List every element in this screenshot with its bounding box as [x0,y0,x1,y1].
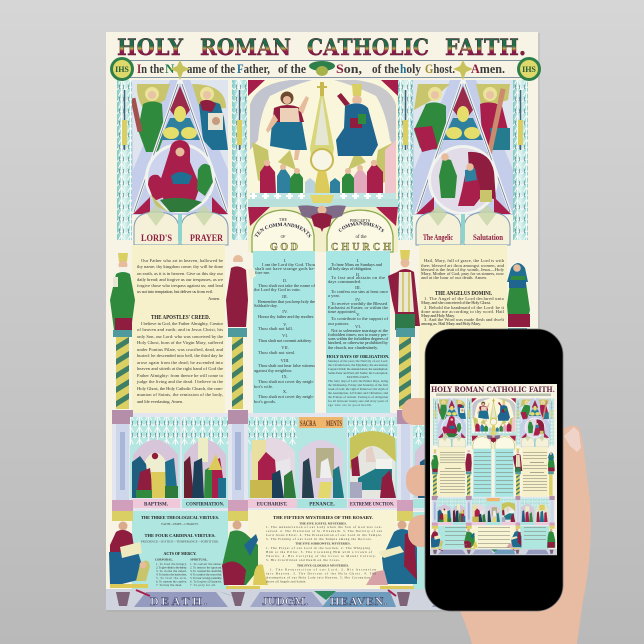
icon: evangelist with bull [366,520,417,589]
sacrament labels: BAPTISM. [144,502,169,508]
text block: precepts of the church: age who are in good health. [328,403,372,407]
heading: sacraments [300,419,342,428]
text block: virtues and mercy: 2. To give drink to the thirsty. [156,566,187,570]
text block: lord's prayer: forgive those who trespass against us; and lead [137,283,224,288]
text block: precepts of the church: To fast and abstain on the [331,275,385,280]
text block: virtues and mercy: 6. To forgive all injuries. [190,580,222,584]
text block: precepts of the church: our pastors. [328,321,349,326]
text block: commandments of god: V. [283,322,287,327]
text block: angelus: 2. Behold the handmaid of the Lord: be it [424,305,505,310]
heading: angelus domini: THE ANGELUS DOMINI. [435,290,492,297]
panel: rosary mysteries [248,510,396,588]
icon: pope figure [388,250,420,330]
arch labels: Salutation [473,232,503,242]
text block: lord's prayer: thy name; thy kingdom come; thy will be done [137,264,223,269]
text block: commandments of god: bor's wife. [254,384,273,389]
text block: precepts of the church: II. [356,272,360,277]
kneeling saints right [330,140,396,193]
sacrament labels: PENANCE. [309,502,335,508]
panel: virtues [132,511,228,589]
heading: sacraments: MENTS [326,419,342,428]
text block: precepts of the church: III. [355,285,361,290]
text block: angelus: 1. The Angel of the Lord declared unto [424,296,505,301]
text block: virtues and mercy: THE FOUR CARDINAL VIRTUES. [144,533,216,538]
text block: lord's prayer: Amen. [208,296,220,301]
text block: virtues and mercy: 4. To harbor the harborless. [156,572,187,576]
text block: precepts of the church: V. [356,312,360,317]
hand holding phone [402,398,591,644]
text block: precepts of the church: the Assumption, All Saints and Christmas; and [328,391,388,396]
phone [425,329,563,611]
text block: precepts of the church: kindred, or otherwise prohibited by [328,340,389,346]
miniature poster on screen [430,384,557,555]
text block: angelus: 3. And the Word was made flesh and dwelt [424,317,505,322]
banner text: DEATH. [150,594,207,608]
text block: commandments of god: II. [283,278,287,283]
arch labels: The Angelic [423,232,453,242]
text block: precepts of the church: a year. [328,293,340,298]
text block: precepts of the church: days commanded. [328,279,361,284]
panel: sacrament band [112,410,530,511]
icon: angel green and red [414,87,446,152]
text block: fifteen mysteries of the rosary: above all Angels and Saints. [266,580,306,584]
text block: commandments of god [254,258,316,404]
banner text: JUDGM. [262,594,308,608]
text block: virtues and mercy: 1. To feed the hungry. [156,562,187,566]
panel: right gothic arch with angels [413,78,513,215]
text block: angelus: Mary and Holy Mary. [421,313,455,318]
icon: christ enthroned [266,92,309,160]
text block: commandments of god: I. [284,258,286,263]
text block: precepts of the church [327,258,389,407]
text block: precepts of the church: Corpus Christi; the Annunciation; the Assumption; [328,367,388,371]
text block: apostles' creed: heaven and sitteth at the right hand of God the [137,366,223,371]
text block: precepts of the church: the Circumcision; the Epiphany; the Ascension; [328,363,388,367]
text block: fifteen mysteries of the rosary: 5. The Finding of our Lord in the Temple among the Doctors. [266,537,372,541]
heading: sacraments: SACRA [300,419,316,428]
text block: precepts of the church: the Fridays of Advent. Fasting is of obligation [328,395,388,399]
text block: precepts of the church: To receive worthily the Blessed [331,301,388,306]
scene: eucharist [248,417,297,498]
invocation line: holy [400,61,421,76]
text block: commandments of god: fore me. [255,270,270,275]
panel: commandment arches [248,195,398,252]
heading: ten commandments of god: GOD [270,242,298,253]
text block: precepts of the church: forbidden times; not to marry per- [328,332,388,337]
heading: ten commandments of god: TEN COMMANDMENTS [254,222,312,238]
text block: apostles' creed: arose again from the dead; he ascended into [137,360,224,365]
text block: virtues and mercy: 4. To comfort the sorrowful. [190,572,222,576]
text block: precepts of the church: week of Lent; the vigil of Pentecost; the vigils of [328,387,389,391]
text block: commandments of god: Thou shalt not take the name of [258,283,315,288]
invocation line: Amen. [471,61,505,76]
text block: precepts of the church: The forty days of Lent; the Ember Days, being [328,379,388,384]
text block: virtues and mercy: ACTS OF MERCY. [164,551,197,556]
scene: extreme unction [348,417,397,498]
text block: commandments of god: Honor thy father and thy mother. [258,314,314,319]
scene: holy orders [463,417,512,498]
text block: hail mary: Hail, Mary, full of grace, the Lord is with [424,258,505,264]
invocation line: of the [278,61,306,76]
heading: commandments of the church [331,218,392,253]
text block: virtues and mercy: 6. To ransom the captive. [156,580,187,584]
text block: fifteen mysteries of the rosary: 5. His Crucifixion and Death on the Cross. [266,558,340,562]
text block: fifteen mysteries of the rosary: THE FIVE GLORIOUS MYSTERIES. [297,564,349,568]
icon: evangelist far right [504,522,532,585]
text block: fifteen mysteries of the rosary: into Heaven. 3. The Descent of the Holy Ghost. 4. The [266,572,377,576]
panel: parchment text fields [132,245,507,413]
text block: commandments of god: I am the Lord thy God. Thou [262,262,316,267]
text block: fifteen mysteries of the rosary: Thorns. 4. His Carrying of the Cross to Mount Calvary. [266,554,376,558]
text block: apostles' creed: Holy Ghost, the Holy Catholic Church, the com- [137,386,223,392]
arch labels [141,232,503,244]
text block: virtues and mercy: CORPORAL. [155,558,173,562]
text block: lord's prayer: us not into temptation, but deliver us from evil. [137,289,213,295]
text block: virtues and mercy: 3. To counsel the doubtful. [190,569,222,573]
text block: virtues and mercy: THE THREE THEOLOGICAL VIRTUES. [141,515,219,520]
text block: fifteen mysteries of the rosary: Assumption of our Holy Lady into Heaven. 5. Her Coronation [266,576,370,580]
heading: ten commandments of god: OF [281,235,285,239]
scene: baptism [130,417,180,498]
panel: centre glory scene [248,80,398,207]
text block: virtues and mercy: 1. To convert the sinner. [190,562,222,566]
text block: fifteen mysteries of the rosary: ceived. 2. The Visitation of St. Elizabeth. 3. The Nativity of our [266,529,382,533]
text block: precepts of the church: Not to solemnize marriage at the [331,328,388,333]
roundel: annunciation [428,145,498,215]
banner text [150,594,387,608]
text block: precepts of the church: IV. [355,297,361,302]
scene: confirmation [182,417,228,498]
title: HOLY [117,35,183,61]
text block: apostles' creed [136,321,224,404]
invocation line: of the [372,61,399,76]
text block: apostles' creed: Father Almighty: from thence he will come to [137,373,224,378]
left pillars [117,80,247,240]
text block: commandments of god: IX. [282,374,288,379]
text block: apostles' creed: Holy Ghost, born of the Virgin Mary, suffered [137,340,224,346]
text block: fifteen mysteries of the rosary: 1. The Prayer of our Lord in the Garden. 2. The Whipping [266,546,370,550]
text block: commandments of god: Thou shalt not covet thy neigh- [258,394,314,399]
text block: commandments of god: the Lord thy God in vain. [254,287,301,292]
sacrament labels: EXTREME UNCTION. [350,502,395,508]
invocation line: ame of the [187,61,235,76]
icon: pope enthroned [336,84,378,156]
icon: angel in green [131,87,164,152]
icon: right roundel with monogram: IHS [522,65,536,74]
icon: monstrance [310,82,334,194]
text block: commandments of god: Thou shalt not covet thy neigh- [258,379,314,384]
text block: apostles' creed: under Pontius Pilate, was crucified, dead, and [137,347,224,353]
text block: precepts of the church: the church, nor clandestinely. [328,345,378,351]
text block: apostles' creed: of heaven and earth; and in Jesus Christ, his [137,327,223,333]
icon: saint patrick figure [110,253,135,330]
poster artwork [106,32,538,610]
text block: commandments of god: Thou shalt not steal. [258,350,295,355]
text block: fifteen mysteries of the rosary: THE FIFTEEN MYSTERIES OF THE ROSARY. [273,515,373,520]
text block: precepts of the church: sons within the forbidden degrees of [328,336,388,341]
title [117,35,526,61]
icon: spiral columns [113,328,527,409]
icon: evangelist in green with lion [222,520,268,589]
text block: angelus: among us. Hail Mary and Holy Mary. [421,321,481,326]
invocation line: In the [137,61,164,76]
text block: fifteen mysteries of the rosary: THE FIVE JOYFUL MYSTERIES. [299,522,347,526]
icon: left roundel with IHS: IHS [115,65,129,74]
invocation line: Son, [336,61,362,76]
heading: apostles' creed: THE APOSTLES' CREED. [151,314,210,321]
heading: commandments of the church: COMMANDMENTS [338,222,384,232]
text block: precepts of the church: To contribute to the support of [331,316,388,321]
text block: commandments of god: Thou shalt not commit adultery. [258,338,312,343]
text block: apostles' creed: judge the living and the dead. I believe in the [136,379,223,384]
text block: lord's prayer: Our Father who art in heaven, hallowed be [141,258,223,264]
scene: marriage [413,417,462,498]
heading: ten commandments of god [254,217,312,253]
sacrament labels [144,502,395,508]
text block: angelus [421,296,505,326]
right pillars [398,80,528,240]
text block: virtues and mercy: 7. To pray for all. [190,583,216,587]
icon: right roundel with monogram [517,57,541,81]
title: FAITH. [445,35,526,61]
text block: commandments of god: Remember that you keep holy the [258,299,315,304]
text block: angelus: Mary, and she conceived of the Holy Ghost. [421,300,491,306]
text block: virtues and mercy: SPIRITUAL. [190,558,208,562]
icon: bust with wings in shield [298,195,346,229]
text block: virtues and mercy [141,515,222,587]
arch labels: LORD'S [141,234,172,244]
text block: fifteen mysteries of the rosary: Lord Jesus Christ. 4. The Presentation of our Lord in the Temple. [266,533,382,537]
text block: lord's prayer: daily bread; and forgive us our trespasses, as we [137,277,223,283]
text block: commandments of god: shalt not have strange gods be- [255,266,315,271]
text block: commandments of god: III. [282,294,288,299]
poster shadow [107,33,540,612]
text block: precepts of the church: HOLY DAYS OF OBLIGATION. [327,354,389,359]
icon: moses figure [226,255,256,327]
text block: virtues and mercy: PRUDENCE—JUSTICE—TEMPERANCE—FORTITUDE. [141,540,219,544]
text block: precepts of the church: To hear Mass on Sundays and [331,262,383,267]
roundel [145,140,215,213]
text block: precepts of the church: Sundays of the year; the Nativity of our Lord; [328,359,388,363]
heading: commandments of the church: of the [355,235,367,240]
text block: precepts of the church: for all between twenty-one and sixty years of [328,399,389,403]
text block: commandments of god: Sabbath-day. [254,303,278,308]
invocation line [130,60,522,78]
text block: commandments of god: IV. [282,309,288,314]
text block: virtues and mercy: 2. To instruct the ignorant. [190,566,222,570]
text block: precepts of the church: Eucharist at Easter, or within the [328,305,388,311]
text block: commandments of god: VII. [281,345,289,350]
arch labels: PRAYER [190,234,223,244]
text block: fifteen mysteries of the rosary: THE FIVE SORROWFUL MYSTERIES. [295,542,351,546]
banner: last things [106,589,538,610]
text block: hail mary [421,258,505,280]
panel: lord's prayer label arches [134,205,228,248]
text block: virtues and mercy: 7. To bury the dead. [156,583,182,587]
text block: commandments of god: X. [283,389,287,394]
icon: angel in blue [199,87,228,150]
label plates [133,499,512,508]
text block: precepts of the church: time appointed. [328,309,357,314]
sacrament labels: CONFIRMATION. [186,502,225,508]
text block: commandments of god: VI. [282,333,288,338]
panel: commandment tablets [253,251,390,414]
text block: hail mary: thee; blessed art thou amongst women, and [421,263,505,269]
icon: angel red and blue [480,87,510,154]
text block: virtues and mercy: FAITH—HOPE—CHARITY. [161,522,199,526]
title: CATHOLIC [307,35,429,61]
banner text: HEAVEN. [330,594,387,608]
title: ROMAN [200,35,291,61]
text block: apostles' creed: and life everlasting. Amen. [137,399,183,404]
text block: precepts of the church: VI. [355,324,361,329]
text block: hail mary: and at the hour of our death. Amen. [421,275,487,280]
text block: lord's prayer [137,258,224,301]
scene: penance [297,417,347,498]
panel: right teal field [413,512,511,590]
text block: fifteen mysteries of the rosary [266,515,382,584]
text block: commandments of god: against thy neighbor. [254,368,292,373]
panel: left gothic arch with angels [131,78,228,215]
miniature poster on screen: HOLY ROMAN CATHOLIC FAITH. [431,385,555,394]
panel: angelic salutation label arches [416,205,510,248]
trefoil [160,86,200,140]
text block: virtues and mercy: 3. To clothe the naked. [156,569,187,573]
invocation line: N [165,61,175,76]
A-frame tracery [133,78,228,214]
text block: virtues and mercy: 5. To bear wrongs patiently. [190,576,222,580]
kneeling saints left [260,160,315,193]
heading: commandments of the church: CHURCH [331,242,391,253]
invocation line: Father, [237,61,270,76]
text block: fifteen mysteries of the rosary: 1. The Annunciation of our Lady when the Son of God was con- [266,525,382,529]
icon: centre wreath [309,61,335,76]
text block: commandments of god: Thou shalt not bear false witness [258,363,315,368]
text block: precepts of the church: To confess our sins at least once [331,289,388,294]
heading: ten commandments of god: THE [279,217,288,222]
text block: virtues and mercy: 5. To visit the sick. [156,576,187,580]
text block: precepts of the church: FASTING DAYS. [347,375,369,379]
text block: lord's prayer: on earth, as it is in heaven. Give us this day our [137,271,223,277]
sacrament labels: EUCHARIST. [257,502,288,508]
icon: star right [453,60,473,80]
text block: commandments of god: VIII. [280,358,290,363]
text block: angelus: done unto me according to thy word. Hail [421,309,505,314]
icon: madonna figure [507,263,530,327]
icon: evangelist red and blue [109,522,150,588]
gold shoulders [112,511,530,521]
icon: star left [170,60,190,80]
text block: precepts of the church: the Wednesday, Friday and Saturday of the first [328,383,388,388]
invocation line: Ghost. [425,61,455,76]
text block: fifteen mysteries of the rosary: 1. The Resurrection of our Lord. 2. His Ascension [270,568,376,572]
text block: apostles' creed: buried: he descended into hell, the third day he [137,353,223,359]
text block: hail mary: blessed is the fruit of thy womb, Jesus—Holy [421,267,505,273]
text block: precepts of the church: all holy days of obligation. [328,266,372,271]
icon: left roundel with IHS [110,57,134,81]
heading: commandments of the church: PRECEPTS [350,218,371,223]
text block: precepts of the church: I. [357,258,359,263]
text block: apostles' creed: I believe in God, the Father Almighty, Creator [141,321,223,327]
text block: commandments of god: Thou shalt not kill. [258,326,293,331]
text block: precepts of the church: Saints Peter and Paul; All Saints; the Conception. [328,371,388,375]
text block: commandments of god: bor's goods. [254,399,276,404]
text block: apostles' creed: only Son, our Lord: who was conceived by the [137,334,223,340]
text block: fifteen mysteries of the rosary: Him at the Pillar. 3. The Crowning Him with a Crown of [266,550,373,554]
text block: hail mary: Mary, Mother of God, pray for us sinners, now [421,271,505,277]
text block: apostles' creed: munion of Saints, the remission of the body, [137,392,223,398]
